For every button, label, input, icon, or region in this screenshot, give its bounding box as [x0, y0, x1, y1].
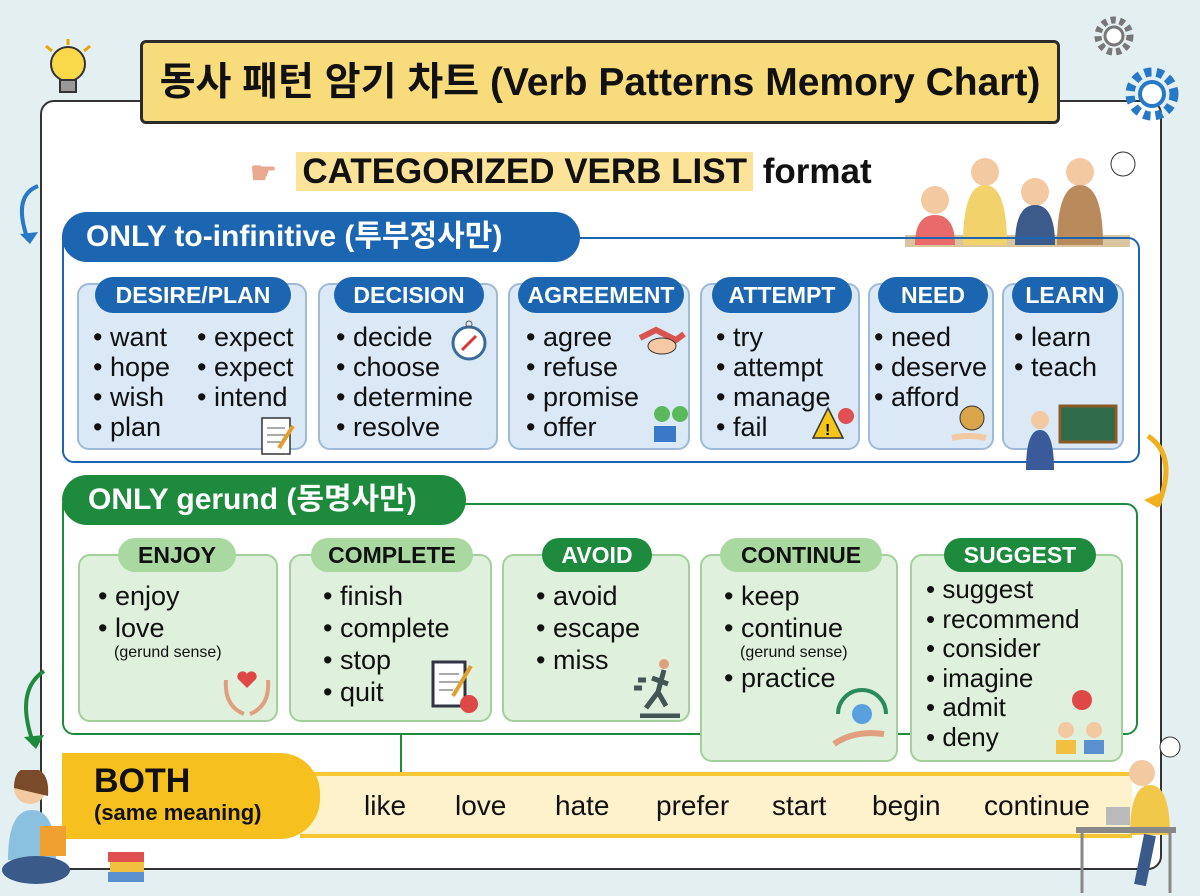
- card: avoid: [502, 554, 690, 722]
- card: desire/plan: • plan: [93, 412, 161, 442]
- card: agreement: • promise: [526, 382, 639, 412]
- card: agreement: [508, 283, 690, 450]
- card: enjoy: • enjoy: [98, 581, 180, 611]
- card: complete: • quit: [323, 677, 384, 707]
- card: complete: • finish: [323, 581, 403, 611]
- card: attempt: !: [825, 422, 830, 439]
- card: need: • afford: [874, 382, 960, 412]
- card: agreement: • offer: [526, 412, 596, 442]
- card: desire/plan: • expect: [197, 322, 294, 352]
- both words: like: [364, 790, 406, 821]
- card: agreement: • refuse: [526, 352, 618, 382]
- both words: love: [455, 790, 506, 821]
- card: complete: • complete: [323, 613, 450, 643]
- card: continue: • keep: [724, 581, 800, 611]
- section: only gerund: [62, 503, 1138, 735]
- card: need: [868, 283, 994, 450]
- card: enjoy: • love: [98, 613, 164, 643]
- card: suggest: • admit: [926, 692, 1006, 722]
- icon: light bulb: [45, 39, 91, 93]
- card: desire/plan: • expect: [197, 352, 294, 382]
- card: continue: (gerund sense): [740, 644, 848, 661]
- card: continue: [700, 554, 898, 762]
- card: attempt: • fail: [716, 412, 767, 442]
- card: avoid: • avoid: [536, 581, 618, 611]
- card: avoid: • miss: [536, 645, 608, 675]
- card: decision: • determine: [336, 382, 473, 412]
- illustration: girl reading: [2, 770, 144, 884]
- heading: only gerund: ONLY gerund (동명사만): [88, 483, 417, 516]
- card: attempt: • try: [716, 322, 763, 352]
- card: complete: COMPLETE: [328, 542, 456, 568]
- heading: both: BOTH: [94, 762, 190, 800]
- card: decision: • resolve: [336, 412, 440, 442]
- connector line: [400, 733, 402, 773]
- both words: start: [772, 790, 826, 821]
- card: attempt: [700, 283, 860, 450]
- card: enjoy: [78, 554, 278, 722]
- both words: continue: [984, 790, 1090, 821]
- card: attempt: • attempt: [716, 352, 823, 382]
- card: need: NEED: [901, 282, 965, 308]
- subtitle: ☛ CATEGORIZED VERB LIST format: [250, 152, 872, 191]
- heading: both: (same meaning): [94, 800, 262, 825]
- card: complete: [289, 554, 492, 722]
- arrows: left and right curved: [20, 184, 39, 244]
- card: avoid: AVOID: [561, 542, 633, 568]
- card: need: • deserve: [874, 352, 987, 382]
- heading: both: [62, 753, 320, 839]
- both words: begin: [872, 790, 941, 821]
- card: need: • need: [874, 322, 951, 352]
- card: suggest: • suggest: [926, 574, 1033, 604]
- card: agreement: • agree: [526, 322, 612, 352]
- card: agreement: AGREEMENT: [528, 282, 674, 308]
- title banner: 동사 패턴 암기 차트 (Verb Patterns Memory Chart): [160, 61, 1040, 104]
- card: enjoy: (gerund sense): [114, 644, 222, 661]
- card: attempt: • manage: [716, 382, 831, 412]
- both words: prefer: [656, 790, 729, 821]
- card: suggest: [910, 554, 1123, 762]
- card: continue: • continue • practice: [724, 613, 843, 693]
- card: decision: • choose: [336, 352, 440, 382]
- card: complete: • stop: [323, 645, 391, 675]
- card: decision: DECISION: [353, 282, 465, 308]
- card: learn: [1002, 283, 1124, 450]
- card: desire/plan: [77, 283, 307, 450]
- heading: only to-infinitive: [62, 212, 580, 262]
- card: learn: • learn: [1014, 322, 1091, 352]
- section: only to-infinitive: [62, 237, 1140, 463]
- card: suggest: • consider: [926, 633, 1041, 663]
- card: enjoy: ENJOY: [138, 542, 216, 568]
- card: suggest: SUGGEST: [964, 542, 1076, 568]
- heading: only gerund: [62, 475, 466, 525]
- card: decision: • decide: [336, 322, 433, 352]
- illustration: boy at laptop: [1076, 736, 1180, 893]
- illustration: students group: [905, 152, 1136, 247]
- card: learn: • teach: [1014, 352, 1097, 382]
- title banner: [140, 40, 1060, 124]
- heading: only to-infinitive: ONLY to-infinitive (투부정사만): [86, 220, 502, 253]
- card: attempt: ATTEMPT: [729, 282, 835, 308]
- card: desire/plan: • intend: [197, 382, 288, 412]
- icon: gears: [1094, 16, 1178, 120]
- card: suggest: • imagine: [926, 662, 1033, 692]
- card: desire/plan: • wish: [93, 382, 164, 412]
- card: suggest: • deny: [926, 722, 999, 752]
- both words: hate: [555, 790, 610, 821]
- card: desire/plan: • hope: [93, 352, 170, 382]
- card: suggest: • recommend: [926, 604, 1080, 634]
- card: continue: CONTINUE: [741, 542, 861, 568]
- card: desire/plan: DESIRE/PLAN: [116, 282, 270, 308]
- card: learn: LEARN: [1025, 282, 1105, 308]
- card: desire/plan: • want: [93, 322, 167, 352]
- card: avoid: • escape: [536, 613, 640, 643]
- card: decision: [318, 283, 498, 450]
- band: both: [300, 772, 1132, 838]
- both words: [364, 790, 1090, 821]
